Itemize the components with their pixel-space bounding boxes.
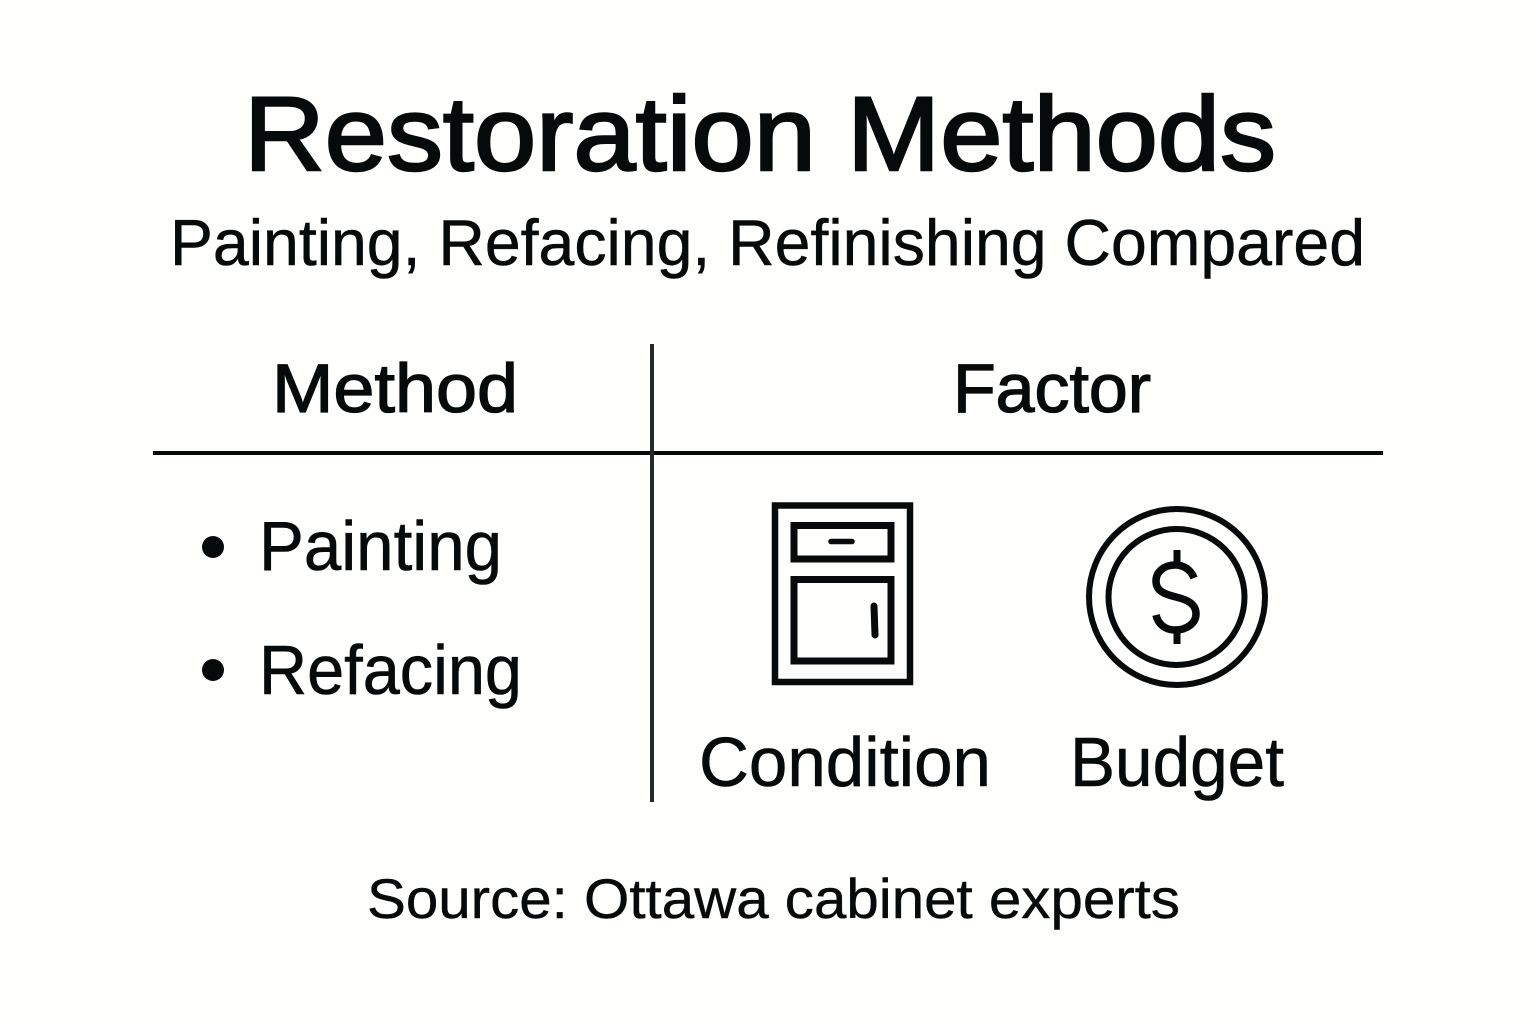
list item: refacing: Refacing xyxy=(259,631,522,709)
list item: painting: Painting xyxy=(259,507,502,585)
icon label: condition: Condition xyxy=(699,723,991,801)
table horizontal rule xyxy=(153,451,1383,455)
table vertical rule xyxy=(650,344,654,802)
icon: cabinet xyxy=(775,506,910,682)
column heading: factor: Factor xyxy=(953,350,1151,427)
icon label: budget: Budget xyxy=(1070,723,1284,801)
source note: Source: Ottawa cabinet experts xyxy=(367,867,1180,930)
icon: dollar coin xyxy=(1089,509,1265,685)
title: Restoration Methods xyxy=(244,76,1276,193)
method list xyxy=(202,507,522,709)
subtitle: Painting, Refacing, Refinishing Compared xyxy=(170,206,1365,279)
column heading: method: Method xyxy=(272,350,518,427)
bullet: refacing xyxy=(202,659,224,681)
bullet: painting xyxy=(202,536,224,558)
comparison table xyxy=(153,344,1383,802)
